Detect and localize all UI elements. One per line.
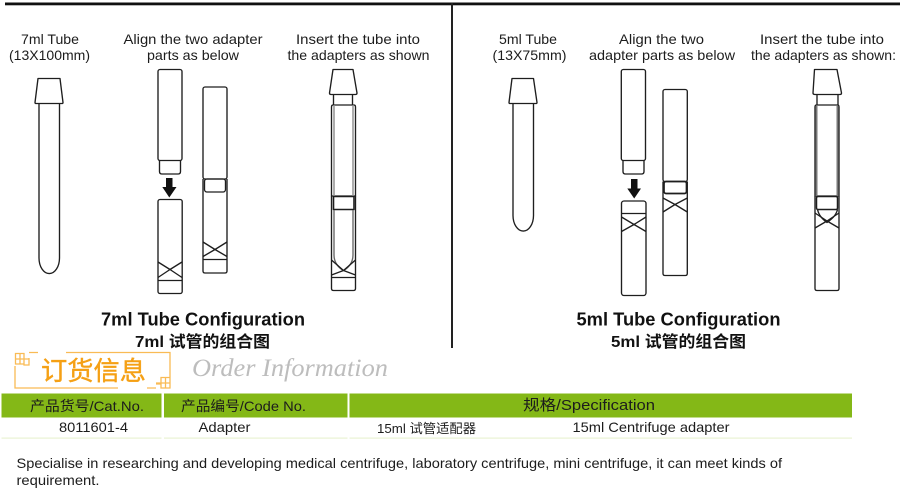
icon: adapter upper part [621,70,646,174]
text block: company description: Specialise in researching and developing medical centrifuge, laboratory centrifuge, mini centrifuge, it can meet kinds of [16,455,782,471]
caption: 5ml tube: 5ml Tube [499,31,557,47]
icon: tube inserted in adapter [330,70,357,290]
icon: adapter lower part [158,200,182,294]
icon: adapter assembled [663,90,687,276]
caption: insert tube: Insert the tube into [296,31,420,47]
arrow: align down [627,179,641,198]
table row: Adapter [198,419,251,435]
table header [2,394,852,418]
caption: align adapters [589,31,736,63]
heading: 5ml configuration: 5ml Tube Configuration [576,310,780,330]
caption: align adapters: adapter parts as below [589,47,736,63]
caption: insert tube: the adapters as shown: [751,47,896,63]
panel: 7ml tube configuration [9,31,430,351]
caption: insert tube: the adapters as shown [288,47,430,63]
caption: align adapters: Align the two adapter [124,31,263,47]
order information banner [15,352,388,388]
heading: 7ml configuration: 7ml 试管的组合图 [135,332,270,351]
caption: 7ml tube: (13X100mm) [9,47,90,63]
table row: 15ml Centrifuge adapter [572,419,730,435]
table header: 产品编号/Code No. [181,398,306,414]
icon: orange key frame [15,352,170,388]
icon: adapter lower part [622,201,646,296]
caption: 5ml tube: (13X75mm) [492,47,566,63]
icon: adapter assembled [203,87,227,273]
arrow: align down [162,178,176,198]
table: order details [2,394,852,439]
panel: 5ml tube configuration [492,31,896,351]
icon: tube inserted in adapter [813,70,842,290]
heading: 7ml configuration: 7ml Tube Configuration [101,310,305,330]
table row: 15ml 试管适配器 [377,421,476,436]
text block: company description [16,455,782,488]
icon: 7ml tube [35,78,63,274]
heading: 7ml configuration [101,310,305,351]
caption: 7ml tube: 7ml Tube [21,31,79,47]
caption: insert tube [288,31,430,63]
heading: order information chinese: 订货信息 [41,356,146,386]
text block: company description: requirement. [16,472,100,488]
icon: 5ml tube [509,78,537,231]
caption: align adapters: parts as below [147,47,240,63]
caption: insert tube [751,31,896,63]
heading: 5ml configuration: 5ml 试管的组合图 [611,332,746,351]
caption: align adapters: Align the two [619,31,704,47]
caption: insert tube: Insert the tube into [760,31,884,47]
caption: align adapters [124,31,263,63]
table row [2,419,852,439]
caption: 7ml tube [9,31,90,63]
table header: 规格/Specification [523,397,655,414]
heading: order information english: Order Information [192,355,388,382]
icon: adapter upper part [158,70,182,174]
heading: 5ml configuration [576,310,780,351]
table header: 产品货号/Cat.No. [30,398,144,414]
table row: 8011601-4 [59,419,128,435]
caption: 5ml tube [492,31,566,63]
